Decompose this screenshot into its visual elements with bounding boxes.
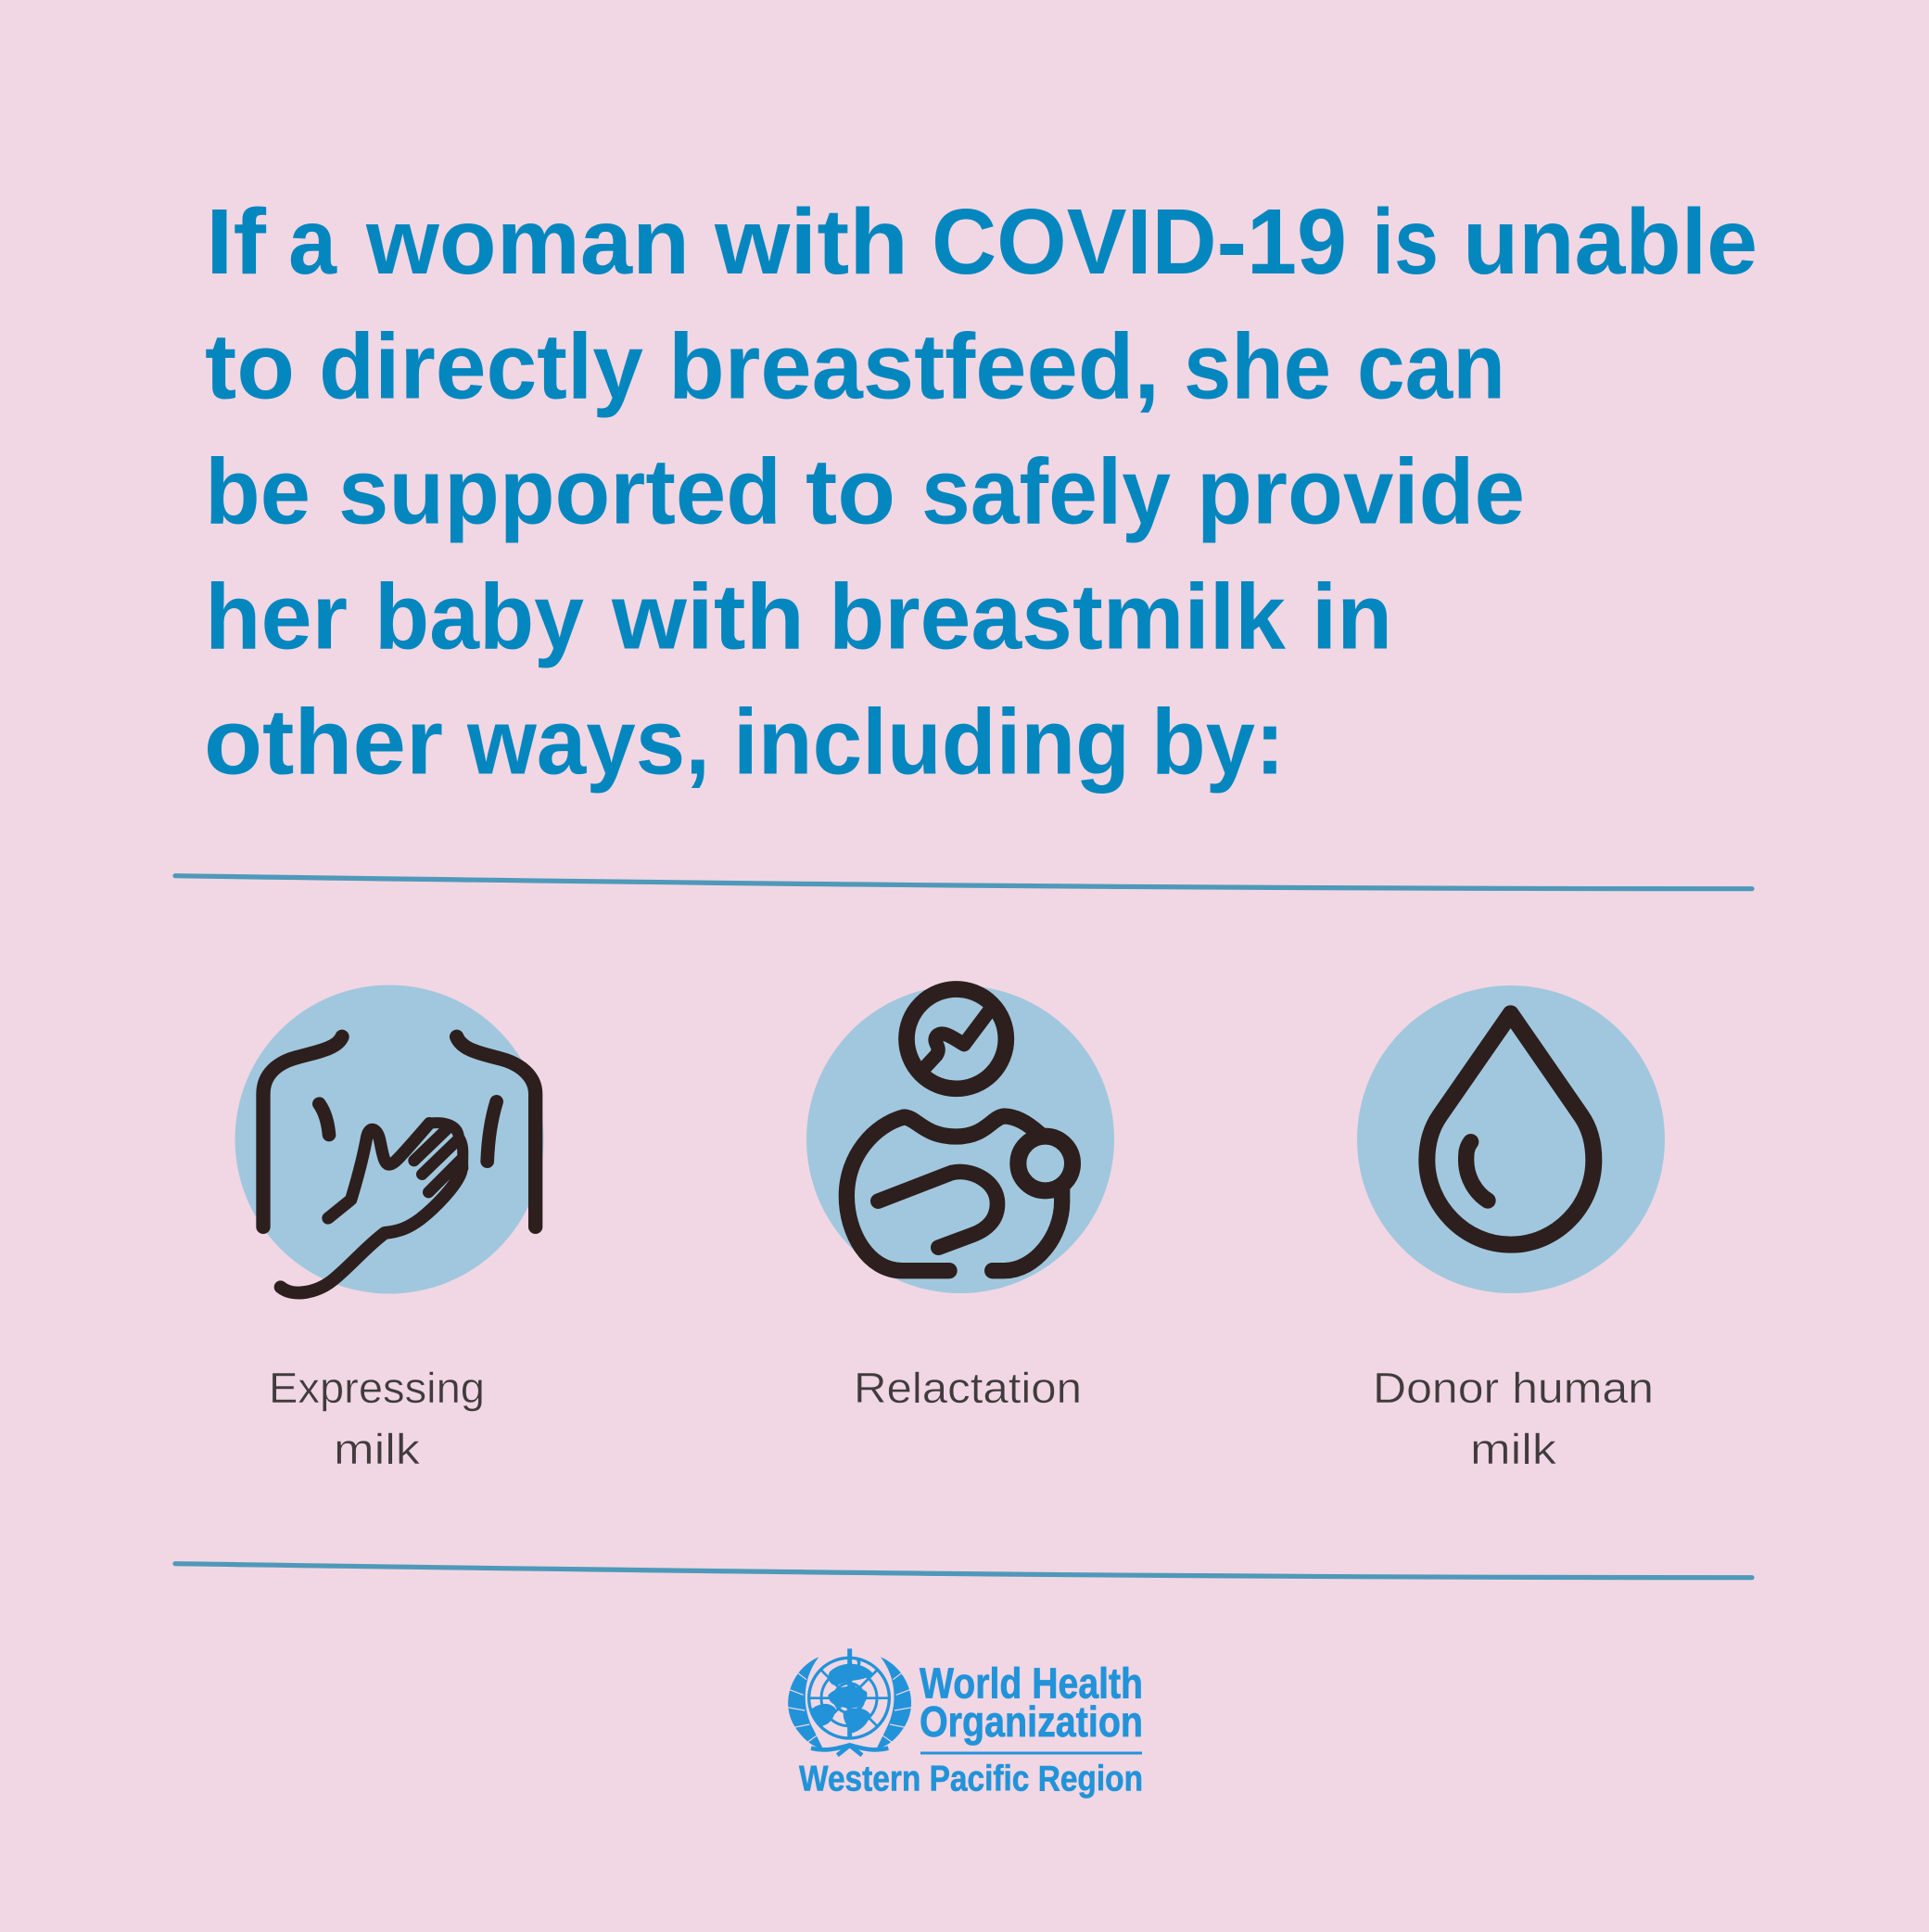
title: she: [1184, 315, 1331, 419]
title: is: [1372, 190, 1439, 294]
label: expressing milk: [269, 1364, 485, 1473]
title: baby: [374, 566, 584, 669]
icon: mother holding baby with no-feeding sign: [806, 985, 1114, 1293]
text: World Health Organization: Organization: [920, 1697, 1143, 1746]
title: unable: [1463, 190, 1758, 294]
title: woman: [365, 190, 690, 294]
logo: World Health Organization Western Pacific Region: [787, 1648, 1143, 1799]
title: ways,: [466, 690, 710, 794]
title: COVID-19: [932, 190, 1347, 294]
icon: hand expressing milk from breast: [235, 985, 543, 1294]
icon: WHO emblem: [787, 1648, 912, 1755]
title: can: [1357, 315, 1505, 419]
title: with: [611, 566, 805, 669]
text: World Health Organization: [920, 1659, 1143, 1746]
title: be: [205, 439, 311, 543]
icon: milk drop: [1357, 985, 1665, 1293]
label: donor human milk: [1373, 1364, 1654, 1473]
title: in: [1312, 566, 1392, 669]
title: breastfeed,: [668, 315, 1160, 419]
panel: donor human milk: [1357, 985, 1665, 1473]
title: to: [205, 315, 295, 419]
title: by:: [1151, 690, 1285, 794]
label: donor human milk: Donor human: [1373, 1364, 1654, 1412]
title: provide: [1197, 439, 1525, 543]
title: supported: [338, 439, 781, 543]
title: with: [714, 190, 908, 294]
label: donor human milk: milk: [1470, 1425, 1557, 1473]
text: World Health Organization: World Health: [920, 1659, 1143, 1708]
title: including: [733, 690, 1130, 794]
title: [204, 190, 1758, 794]
title: directly: [319, 315, 643, 419]
text: Western Pacific Region: Western Pacific Region: [799, 1760, 1143, 1799]
label: expressing milk: Expressing: [269, 1364, 485, 1412]
label: relactation: Relactation: [854, 1364, 1082, 1412]
title: If: [206, 190, 267, 294]
title: a: [288, 190, 337, 294]
panel: relactation: [806, 985, 1114, 1412]
title: other: [204, 690, 443, 794]
title: breastmilk: [829, 566, 1286, 669]
title: to: [806, 439, 895, 543]
label: expressing milk: milk: [334, 1425, 421, 1473]
title: her: [205, 566, 348, 669]
panel: expressing milk: [235, 985, 543, 1473]
title: safely: [921, 439, 1171, 543]
